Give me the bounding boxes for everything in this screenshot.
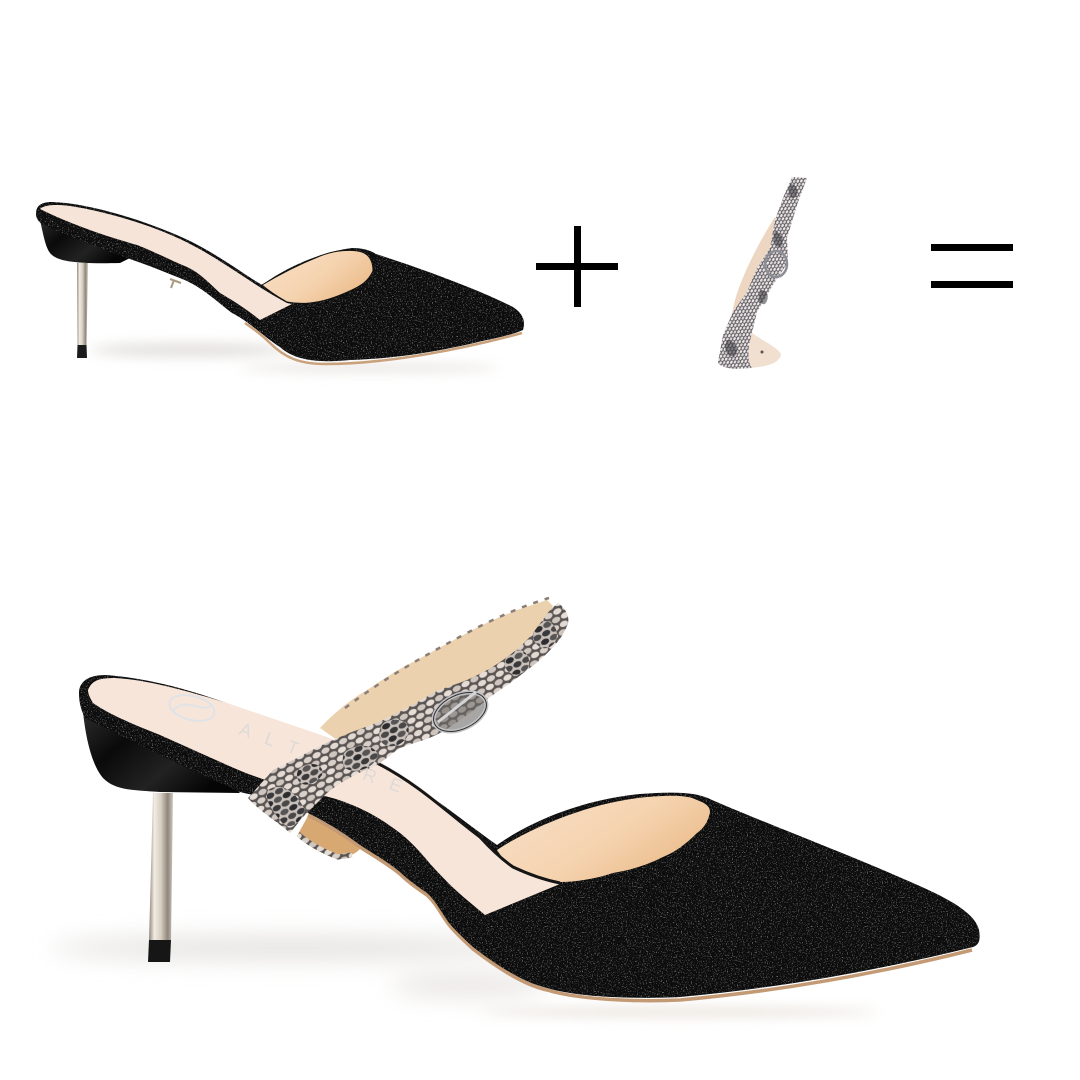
- front snakeskin strap: [248, 603, 568, 833]
- small shoe insole: [40, 205, 292, 320]
- strap snakeskin band: [718, 177, 807, 369]
- strap small buckle: [765, 251, 787, 277]
- metal buckle: [427, 685, 493, 739]
- large shoe suede body: [79, 675, 980, 998]
- large shoe heel wedge: [83, 712, 240, 793]
- strap dark skin patches: [725, 184, 798, 356]
- strap tail under shoe: [298, 816, 361, 857]
- large shoe floor shadow: [50, 936, 880, 1016]
- large shoe stiletto heel: [149, 793, 173, 941]
- small shoe sole edge: [245, 323, 522, 364]
- small shoe heel wedge: [40, 220, 130, 263]
- small shoe charm: [170, 279, 181, 288]
- small black mule shoe: [36, 202, 524, 372]
- strap dark skin patches: [267, 621, 557, 826]
- snakeskin strap accessory: [718, 177, 807, 369]
- small shoe stiletto heel: [77, 263, 88, 346]
- infographic canvas: [36, 177, 1013, 1021]
- large shoe heel tip: [148, 940, 171, 962]
- back strap tan lining: [320, 600, 553, 742]
- small shoe suede body: [36, 202, 524, 361]
- back strap stitched edge: [345, 598, 549, 708]
- lining edge line: [377, 763, 560, 883]
- equals sign: [931, 244, 1013, 288]
- small shoe inner lining: [262, 250, 373, 303]
- large shoe inner lining: [497, 796, 710, 882]
- large styled shoe with strap: [50, 595, 980, 1016]
- large shoe sole edge: [308, 815, 972, 1001]
- strap tan lining: [728, 217, 785, 330]
- small shoe heel tip: [77, 345, 87, 358]
- strap rivet: [760, 350, 764, 354]
- small shoe floor shadow: [90, 343, 500, 372]
- plus sign: [536, 226, 618, 307]
- strap base tab: [735, 333, 781, 368]
- insole brand logo: [167, 691, 217, 725]
- large shoe insole: [88, 678, 560, 915]
- insole brand text: ALTERRE: [237, 719, 419, 802]
